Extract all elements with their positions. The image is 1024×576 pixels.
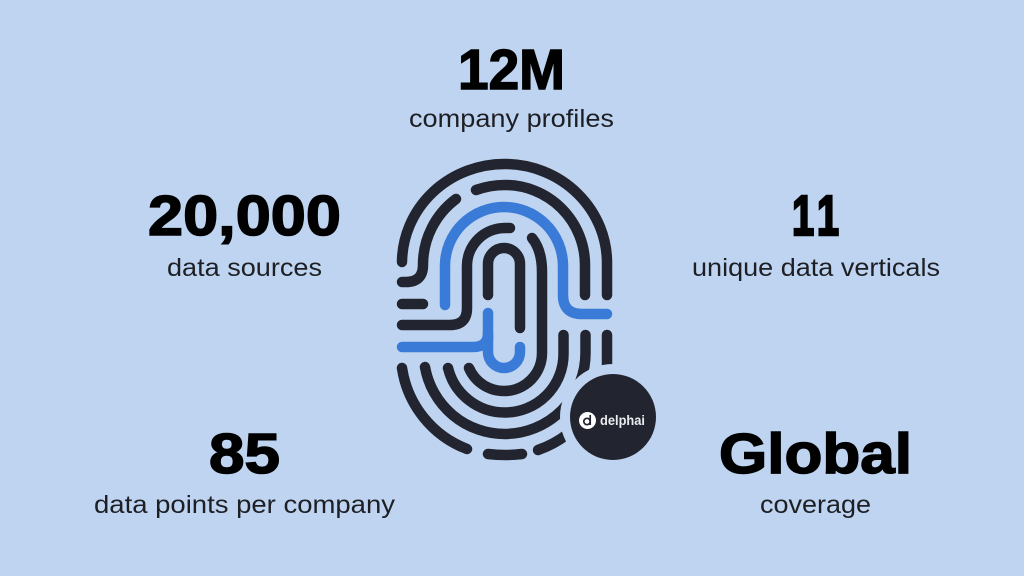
stat: 11 unique data verticals: unique data verticals bbox=[692, 254, 940, 282]
logo badge bbox=[560, 364, 666, 470]
stat: 20,000 data sources: data sources bbox=[167, 254, 322, 282]
stat: 20,000 data sources bbox=[148, 184, 341, 282]
stat: 85 data points per company: 85 bbox=[209, 422, 280, 486]
icon: fingerprint bbox=[402, 164, 666, 470]
stat: 12M company profiles: 12M bbox=[458, 38, 565, 102]
stat: Global coverage: Global bbox=[719, 422, 912, 486]
stat: Global coverage: coverage bbox=[760, 491, 871, 519]
stat: 12M company profiles: company profiles bbox=[409, 105, 614, 133]
stat: Global coverage bbox=[719, 422, 912, 519]
stat: 20,000 data sources: 20,000 bbox=[148, 184, 341, 248]
stat: 11 unique data verticals: 11 bbox=[792, 184, 844, 248]
stat: 85 data points per company: data points per company bbox=[94, 491, 396, 519]
stat: 12M company profiles bbox=[409, 38, 614, 133]
logo badge: delphai bbox=[600, 412, 645, 428]
stat: 85 data points per company bbox=[94, 422, 396, 519]
stat: 11 unique data verticals bbox=[692, 184, 940, 282]
